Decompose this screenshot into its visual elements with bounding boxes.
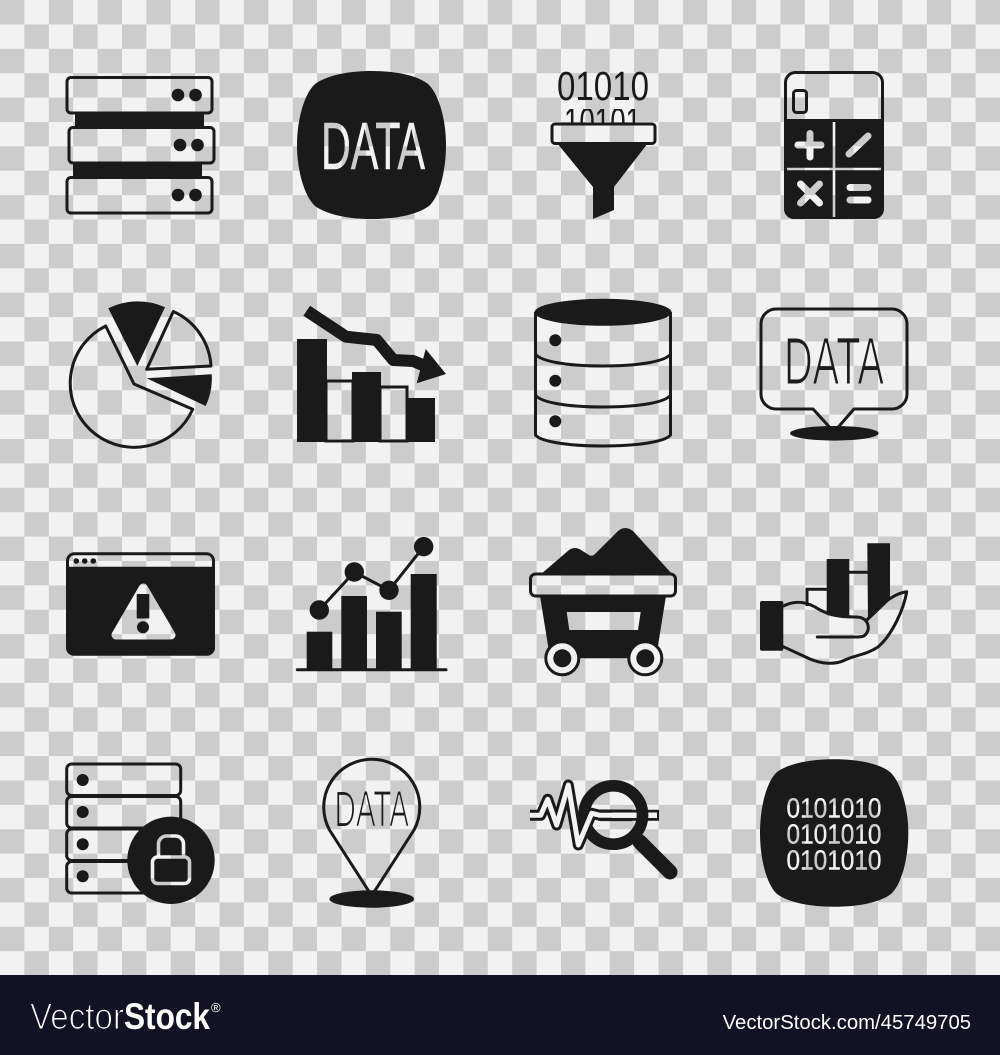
footer logo: Stock [124,996,210,1037]
icon: data funnel: 10101 [564,99,641,145]
icon: waveform magnifier [530,785,670,872]
icon: mine cart [530,528,676,675]
footer image id: VectorStock.com/45749705 [723,1012,971,1034]
icon: calculator [784,72,884,219]
icon: DATA badge [297,71,446,219]
footer bar [0,975,1000,1055]
icon: pie chart [70,301,212,447]
icon: binary badge: 0101010 [786,792,882,823]
icon: hand holding bars [760,543,907,663]
icon: DATA speech bubble: DATA [784,324,884,399]
footer logo: ® [211,1000,221,1015]
icon: binary badge: 0101010 [786,818,882,849]
icon: binary badge [760,759,908,907]
icon: rising bar chart with line [297,537,446,670]
icon: browser warning [66,554,215,656]
footer logo [30,996,221,1037]
icon: locked server [67,764,215,904]
footer logo: Vector [30,996,124,1037]
icon: server rack [67,78,214,213]
icon: data funnel: 01010 [557,63,649,109]
icon: DATA speech bubble [761,309,907,441]
icon: binary badge: 0101010 [786,844,882,875]
icon: data funnel [552,63,655,219]
icon: DATA map pin [324,759,420,908]
icon: DATA map pin: DATA [334,781,409,838]
icon: database cylinder [534,299,672,446]
icon: falling bar chart [297,311,446,442]
icon: DATA badge: DATA [321,109,425,184]
